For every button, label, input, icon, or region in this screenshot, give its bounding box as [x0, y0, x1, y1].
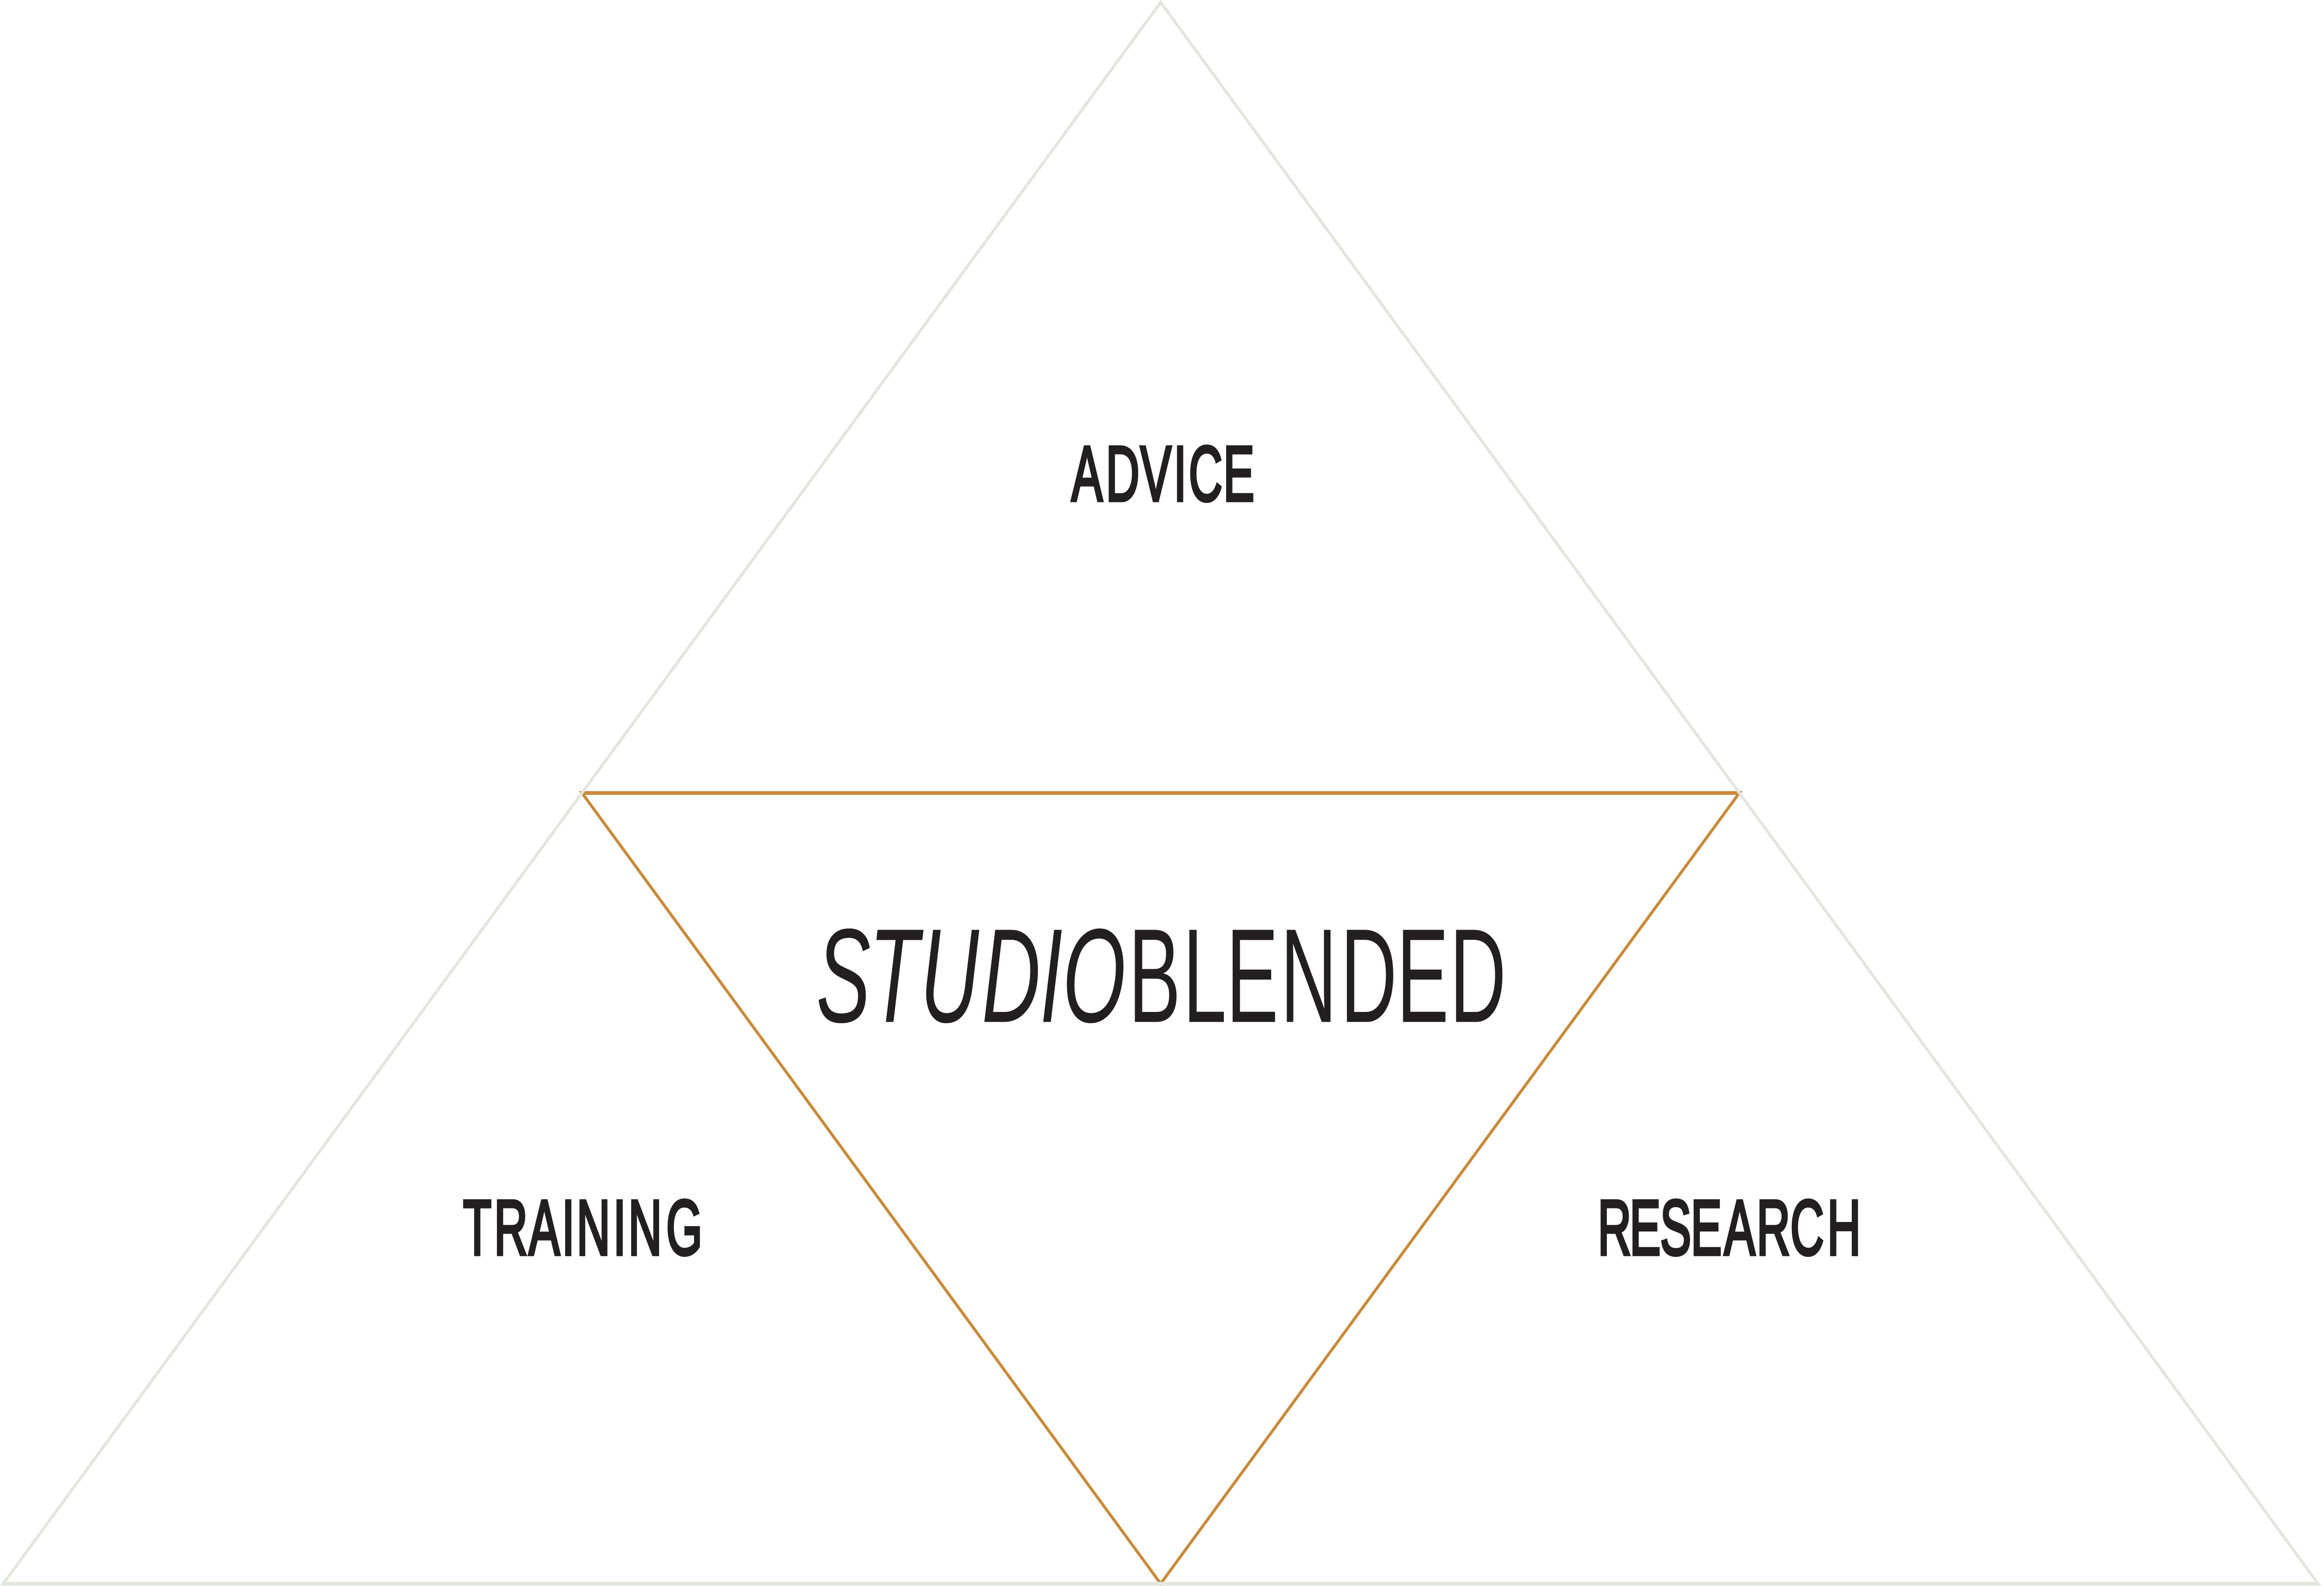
- heading: STUDIOBLENDED: STUDIO: [816, 901, 1126, 1051]
- heading: TRAINING: TRAINING: [463, 1184, 702, 1271]
- heading: STUDIOBLENDED: BLENDED: [1129, 900, 1506, 1051]
- heading: STUDIOBLENDED: [816, 900, 1506, 1051]
- heading: RESEARCH: RESEARCH: [1598, 1184, 1861, 1271]
- heading: ADVICE: ADVICE: [1071, 430, 1254, 517]
- panel: inner inverted triangle: [582, 793, 1739, 1584]
